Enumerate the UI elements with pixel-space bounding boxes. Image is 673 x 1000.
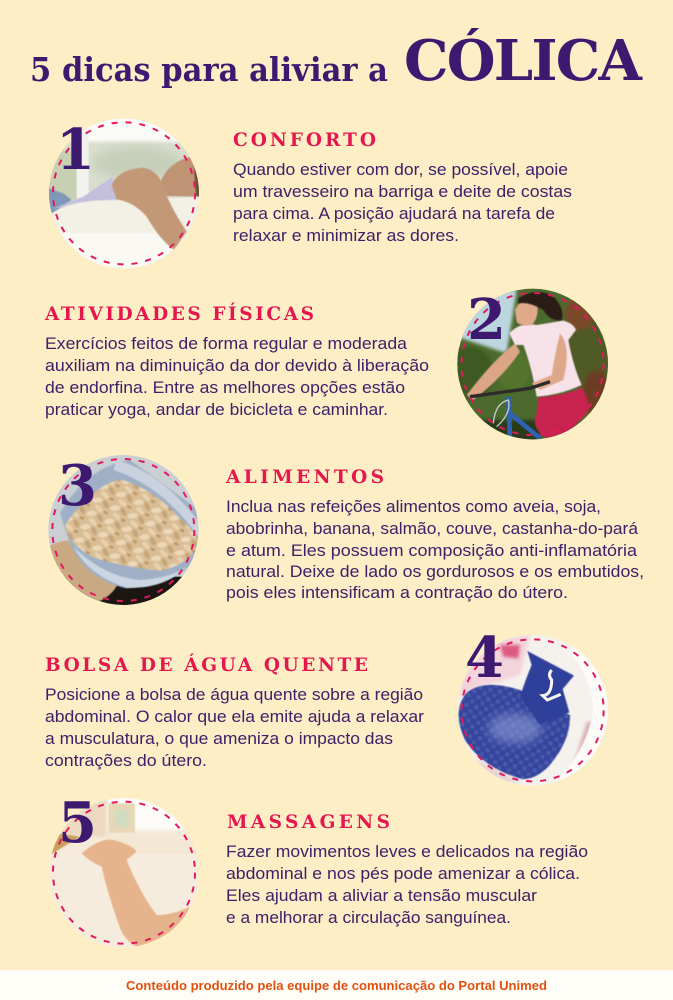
panel: tip 2 atividades fisicas [44, 287, 613, 443]
number 2: 2 [467, 287, 506, 353]
number 5: 5 [58, 790, 97, 856]
text: bolsa de agua quente [45, 685, 424, 770]
photo: woman resting on a pillow [47, 117, 207, 270]
panel: tip 3 alimentos [30, 453, 644, 610]
number 4: 4 [465, 625, 504, 691]
text: conforto: Quando estiver com dor, se possível, apoie [233, 160, 568, 179]
text: atividades fisicas [45, 334, 429, 419]
text: bolsa de agua quente: a musculatura, o que ameniza o impacto das [45, 729, 393, 748]
photo: woman riding a bicycle [457, 288, 608, 440]
text: conforto: um travesseiro na barriga e deite de costas [233, 182, 572, 201]
text: alimentos: abobrinha, banana, salmão, couve, castanha-do-pará [226, 519, 639, 538]
text: atividades fisicas: Exercícios feitos de forma regular e moderada [45, 334, 408, 353]
photo: massage on towel [47, 797, 203, 953]
panel: tip 5 massagens [47, 790, 588, 953]
text: conforto: relaxar e minimizar as dores. [233, 226, 459, 245]
text: massagens: abdominal e nos pés pode amenizar a cólica. [226, 864, 580, 883]
panel: tip 1 conforto [47, 117, 572, 270]
text: massagens [226, 842, 588, 927]
text: conforto [233, 160, 572, 245]
heading: bolsa de agua quente: BOLSA DE ÁGUA QUENTE [45, 653, 368, 676]
text: massagens: Fazer movimentos leves e delicados na região [226, 842, 588, 861]
photo: bowl of oats [48, 455, 198, 605]
footer [0, 970, 673, 1000]
text: massagens: Eles ajudam a aliviar a tensão muscular [226, 886, 537, 905]
text: alimentos [226, 497, 644, 602]
heading: massagens: MASSAGENS [227, 812, 390, 833]
text: atividades fisicas: praticar yoga, andar de bicicleta e caminhar. [45, 400, 388, 419]
text: alimentos: natural. Deixe de lado os gordurosos e os embutidos, [226, 562, 644, 581]
number 1: 1 [56, 117, 95, 183]
text: alimentos: Inclua nas refeições alimentos como aveia, soja, [226, 497, 601, 516]
text: alimentos: pois eles intensificam a contração do útero. [226, 583, 568, 602]
text: conforto: para cima. A posição ajudará na tarefa de [233, 204, 555, 223]
text: atividades fisicas: de endorfina. Entre as melhores opções estão [45, 378, 405, 397]
title: 5 dicas para aliviar a [30, 50, 388, 89]
panel: tip 4 bolsa de agua quente [46, 635, 608, 786]
text: atividades fisicas: auxiliam na diminuição da dor devido à liberação [45, 356, 429, 375]
footer: Conteúdo produzido pela equipe de comunicação do Portal Unimed [126, 979, 547, 993]
heading: atividades fisicas: ATIVIDADES FÍSICAS [44, 302, 314, 325]
text: bolsa de agua quente: abdominal. O calor que ela emite ajuda a relaxar [45, 707, 424, 726]
number 3: 3 [58, 453, 97, 519]
title: CÓLICA [404, 28, 644, 94]
text: massagens: e a melhorar a circulação sanguínea. [226, 908, 511, 927]
text: bolsa de agua quente: contrações do útero. [45, 751, 207, 770]
text: alimentos: e atum. Eles possuem composição anti-inflamatória [226, 541, 638, 560]
text: bolsa de agua quente: Posicione a bolsa de água quente sobre a região [45, 685, 423, 704]
heading: alimentos: ALIMENTOS [225, 467, 384, 488]
title [30, 28, 644, 94]
heading: conforto: CONFORTO [233, 130, 376, 151]
photo: blue heart-shaped hot water bottle [457, 635, 608, 786]
